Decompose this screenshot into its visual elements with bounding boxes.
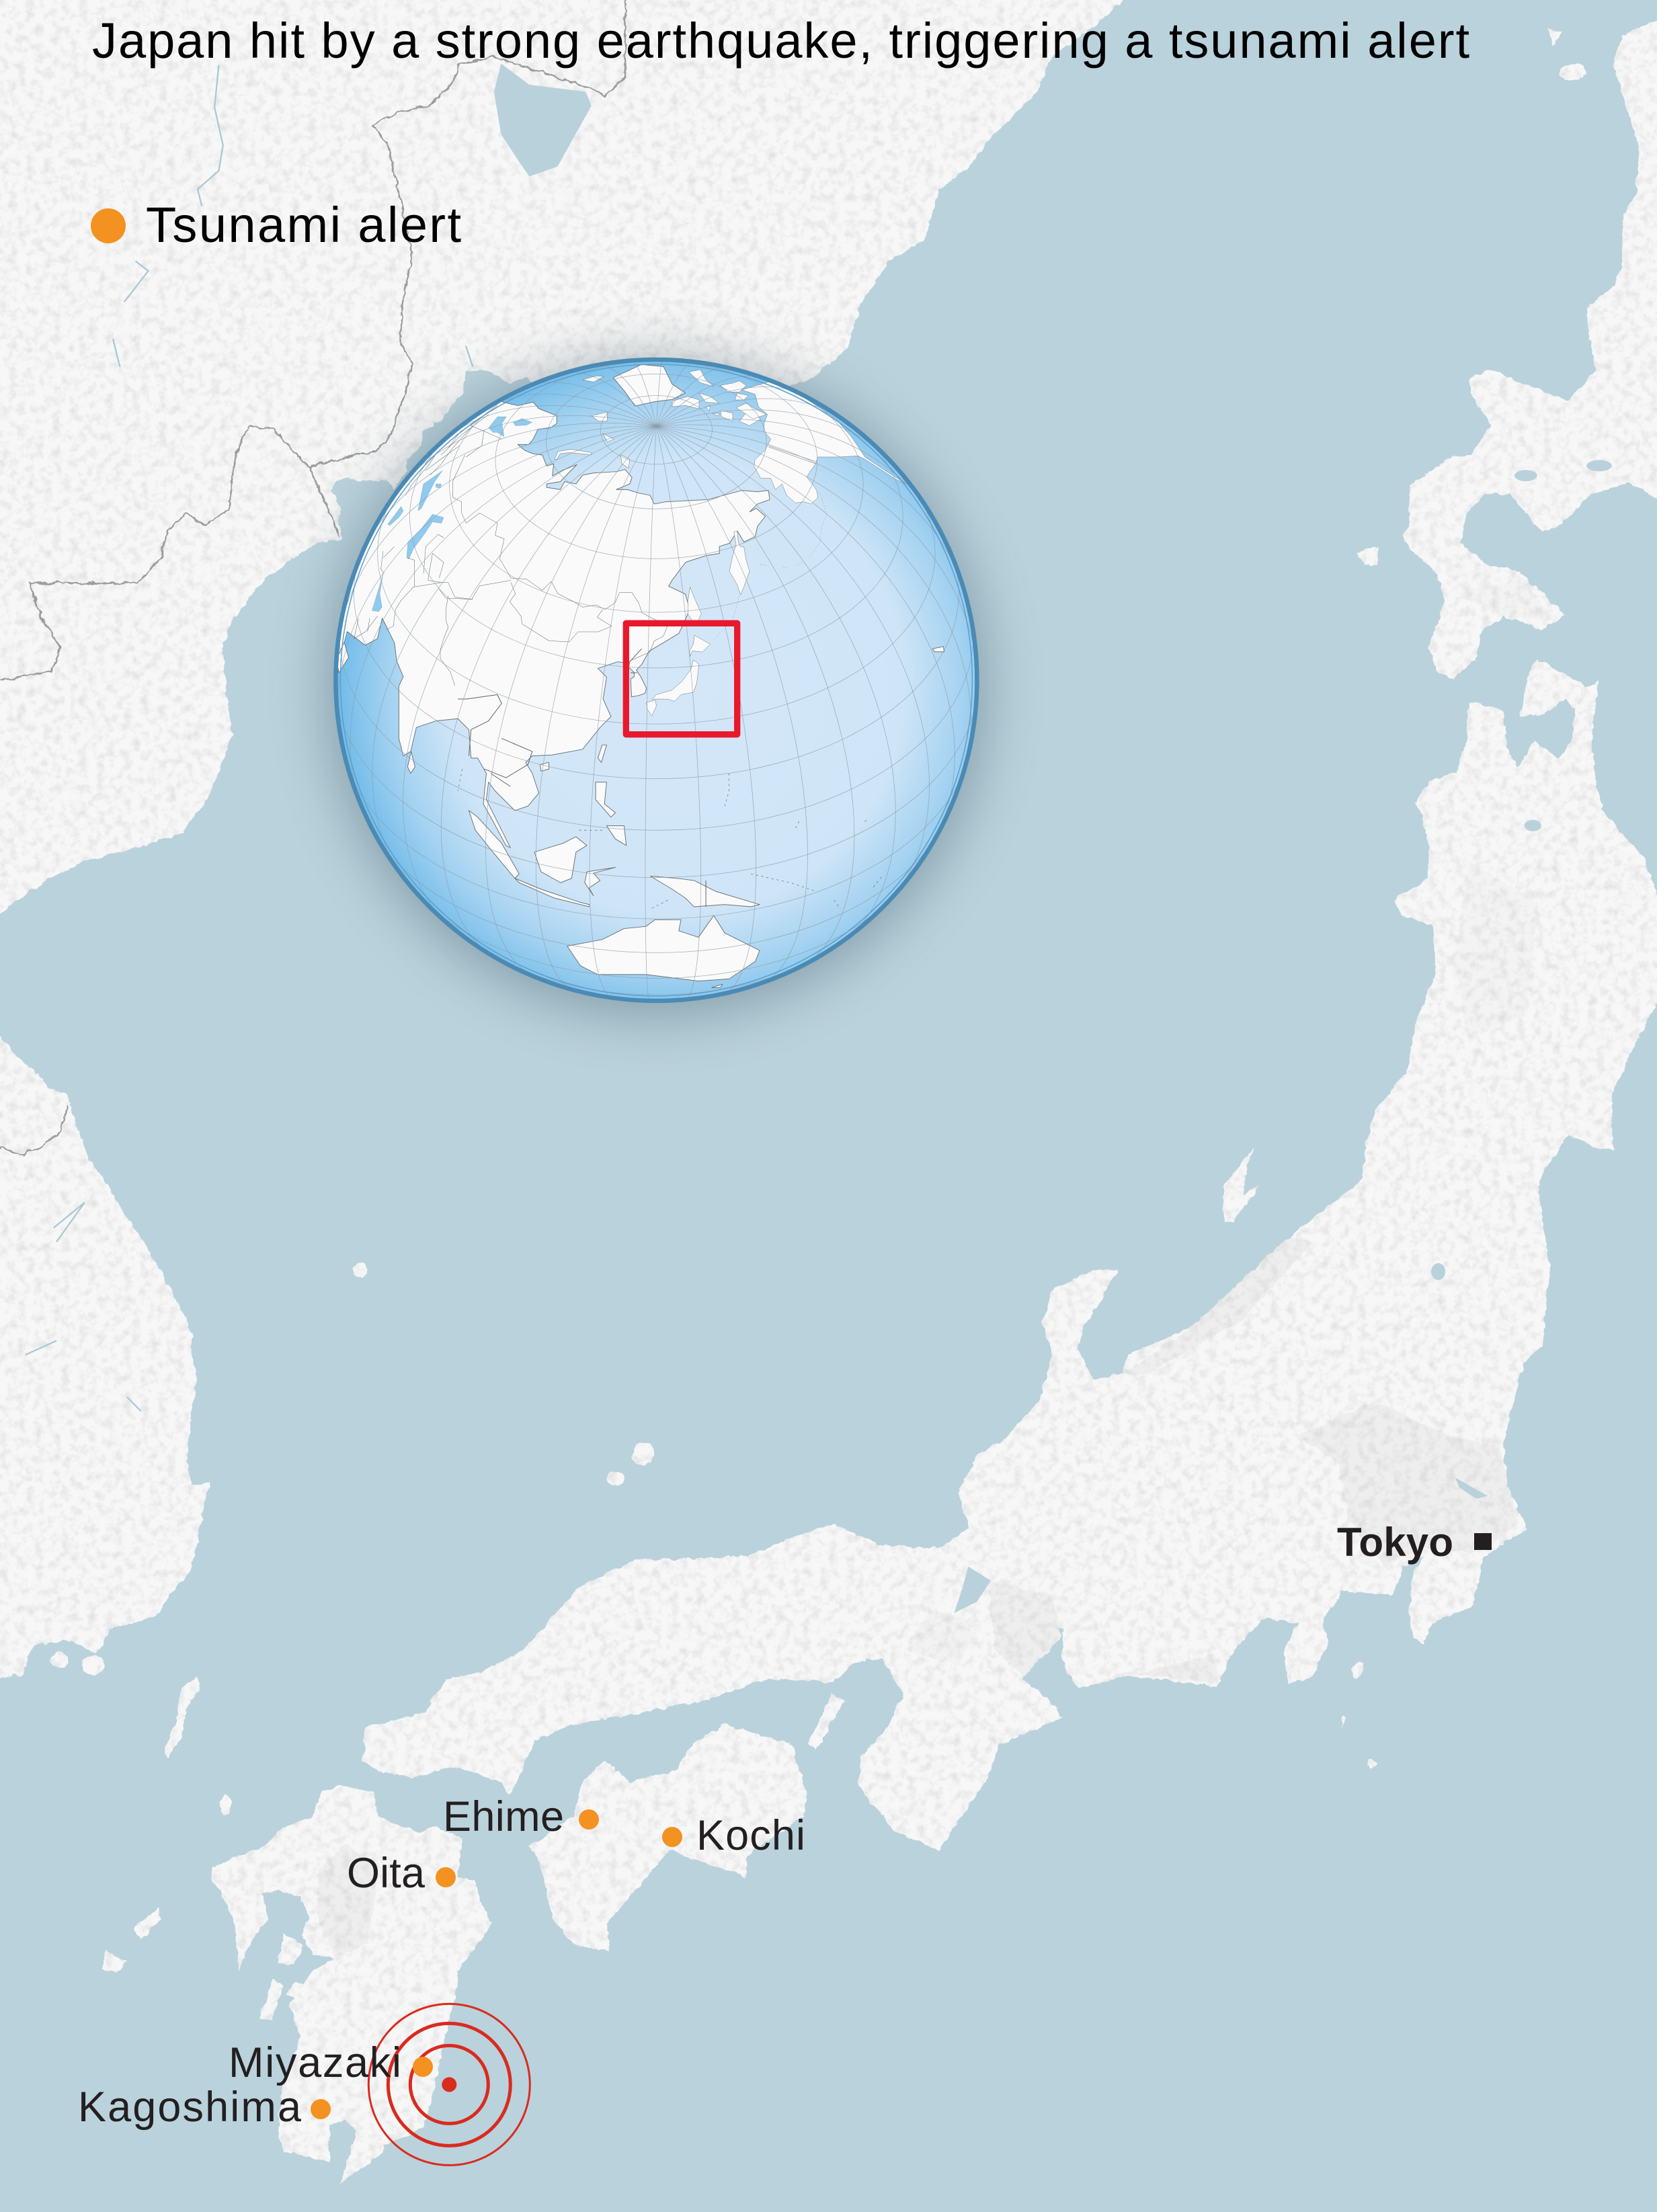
land: Kyushu — [212, 1785, 493, 2184]
earthquake epicentre rings — [368, 2004, 530, 2165]
land: Hokkaido — [1403, 14, 1657, 679]
land: Shikoku — [529, 1725, 807, 1952]
globe: Arctic islands — [555, 376, 630, 468]
globe: Kamchatka and Sakhalin — [672, 370, 906, 626]
globe graticule — [335, 359, 978, 1002]
legend: tsunami alert — [91, 197, 461, 253]
legend label: Tsunami alert — [146, 197, 461, 253]
globe: North America — [741, 382, 906, 504]
globe: enclosed seas — [372, 417, 532, 612]
land: Korean peninsula — [0, 1019, 210, 1682]
place: Kagoshima: Kagoshima — [78, 2084, 302, 2131]
globe land: Eurasia and neighbours — [318, 364, 944, 987]
locator globe — [318, 359, 978, 1002]
lowland shading on Japan — [317, 579, 1553, 1957]
land: Asian mainland — [0, 0, 1122, 920]
place: Oita: Oita — [347, 1850, 426, 1897]
red locator box — [626, 623, 737, 735]
globe land and graticule — [318, 359, 978, 1002]
globe ocean — [335, 359, 977, 1001]
globe: Canadian Arctic islands — [672, 370, 766, 425]
rivers — [26, 65, 473, 1411]
globe: country borders — [354, 405, 815, 907]
place: Kochi: Kochi — [696, 1812, 805, 1859]
legend dot — [91, 208, 126, 243]
globe: small island chains — [458, 493, 882, 909]
globe rim — [335, 360, 977, 1001]
title: Japan hit by a strong earthquake, triggering a tsunami alert — [92, 13, 1469, 69]
inland water — [494, 63, 1612, 1613]
national borders — [0, 0, 625, 1155]
globe: Japan — [646, 635, 710, 716]
place: Tokyo: Tokyo — [1337, 1520, 1453, 1565]
place: Miyazaki: Miyazaki — [229, 2039, 401, 2086]
land: Honshu — [363, 659, 1657, 1850]
globe shadow — [327, 358, 985, 1016]
place: Ehime: Ehime — [443, 1793, 564, 1840]
globe: Southeast Asia and Australia — [336, 642, 944, 987]
